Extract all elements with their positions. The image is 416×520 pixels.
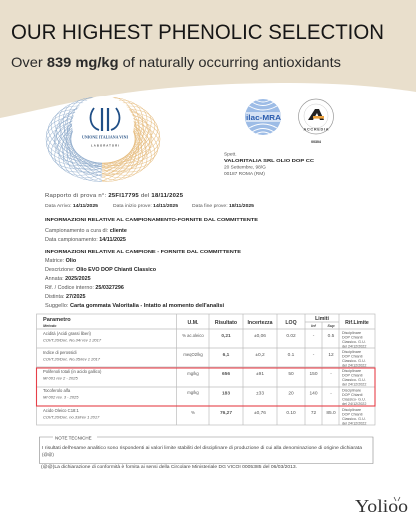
row: tocoferolo: MI 002 rev. 3 - 2025 [43, 394, 79, 400]
footnote: (@@)La dichiarazione di conformità è fornita ai sensi della Circolare Ministeriale DG VICOI 0005385 del 06/03/2013. [41, 464, 297, 469]
icon: Accredia logo [298, 99, 334, 134]
row: acido oleico: 0.10 [286, 410, 296, 416]
sampling information: INFORMAZIONI RELATIVE AL CAMPIONAMENTO-FORNITE DAL COMMITTENTE [45, 217, 259, 223]
logo subtext: LABORATORI [91, 144, 119, 148]
addressee block: Spett. [224, 152, 237, 158]
row: tocoferolo: Tocoferolo alfa [43, 388, 71, 393]
row: acido oleico: ±0,76 [254, 410, 266, 416]
dates line: Data Arrivo: 14/11/2025 [45, 203, 99, 208]
row: acidita: COI/T.20/Doc. No.34/ rev 1 2017 [43, 338, 102, 342]
header banner background [0, 0, 416, 118]
row: acido oleico: Disciplinare [342, 408, 361, 412]
guilloche orange half [102, 97, 160, 182]
sample information: Annata: 2025/2025 [45, 276, 91, 282]
table header: Metodo [43, 324, 57, 328]
row: perossidi: Indice di perossidi [43, 350, 77, 355]
row: polifenoli: Classico- G.U. [342, 378, 366, 382]
table header: Parametro [43, 317, 71, 323]
addressee block: VALORITALIA SRL OLIO DOP CC [224, 158, 315, 164]
technical notes box: (@@) [42, 452, 54, 457]
row: polifenoli: mg/kg [187, 371, 199, 376]
row: perossidi: - [313, 353, 315, 358]
row: polifenoli: Disciplinare [342, 369, 361, 373]
technical notes box [40, 436, 373, 464]
report number line: Rapporto di prova n°: 25FI17795 del 18/11/2025 [45, 193, 184, 199]
row: polifenoli: 656 [222, 371, 230, 377]
table header: Risultato [215, 320, 237, 326]
row: acido oleico: % [191, 410, 195, 415]
results table [36, 314, 375, 425]
row: acido oleico: Acido Oleico C18:1 [43, 408, 80, 413]
table header: U.M. [188, 320, 199, 326]
row: polifenoli: del 24/12/2022 [342, 382, 366, 386]
sample information: Suggello: Carta gommata Valoritalia - Intatto al momento dell'analisi [45, 303, 225, 309]
row: polifenoli: 150 [309, 371, 318, 377]
row: tocoferolo [43, 388, 366, 406]
row: polifenoli: Polifenoli totali (in acido gallico) [43, 369, 102, 374]
sample information: INFORMAZIONI RELATIVE AL CAMPIONE - FORNITE DAL COMMITTENTE [45, 249, 242, 255]
row: polifenoli [43, 369, 366, 386]
dates line [45, 203, 255, 208]
addressee block: 00187 ROMA (RM) [224, 171, 265, 177]
row: tocoferolo: Classico- G.U. [342, 398, 366, 402]
row: tocoferolo: 140 [309, 390, 318, 396]
row: tocoferolo: 20 [288, 390, 294, 396]
row: perossidi: COI/T.20/Doc. No.35/rev 1 2017 [43, 356, 101, 362]
row: tocoferolo: mg/kg [187, 390, 199, 395]
addressee block [224, 152, 315, 177]
dates line: Data fine prove: 18/11/2025 [192, 203, 255, 208]
row: acidita [43, 331, 366, 348]
notes label: NOTE TECNICHE [55, 436, 92, 440]
row: polifenoli: MI 001 rev 2 - 2025 [43, 376, 78, 380]
sampling information: Campionamento a cura di: cliente [45, 228, 127, 234]
row: perossidi: del 24/12/2022 [342, 363, 366, 367]
sample information [45, 249, 242, 309]
row: acidita: DOP Chianti [342, 336, 363, 340]
table header [43, 316, 369, 328]
sample information: Descrizione: Olio EVO DOP Chianti Classico [45, 267, 157, 273]
row: acidita: Disciplinare [342, 331, 361, 335]
row: acidita: ±0,06 [254, 333, 266, 339]
sampling information: Data campionamento: 14/11/2025 [45, 237, 126, 243]
row: perossidi: Disciplinare [342, 350, 361, 354]
row: acidita: - [313, 334, 315, 339]
row: acido oleico: 72 [311, 410, 316, 416]
row: acido oleico: del 24/12/2022 [342, 421, 366, 425]
table header: Inf [311, 324, 317, 328]
logo white centre [72, 96, 134, 154]
row: polifenoli: ±91 [256, 371, 264, 377]
row: perossidi [43, 350, 366, 367]
icon: ilac-MRA logo [245, 99, 282, 135]
row: acido oleico: Classico- G.U. [342, 417, 366, 421]
row: acidita: Classico- G.U. [342, 340, 366, 344]
notes text: I risultati dell'esame analitico sono rispondenti ai valori limite stabiliti del disciplinare di produzione di cui alla denominazione di origine dichiarata [42, 445, 363, 450]
logo mark [91, 108, 119, 131]
row: perossidi: 12 [328, 352, 334, 358]
table header: Rif.Limite [345, 320, 369, 326]
row: perossidi: meqO2/kg [183, 352, 203, 357]
row: perossidi: 0.1 [288, 352, 295, 358]
table header: Limiti [315, 316, 329, 322]
guilloche logo: Unione Italiana Vini [46, 96, 160, 182]
row: acidita: Acidità (Acidi grassi liberi) [43, 331, 92, 336]
sample information: Distinta: 27/2025 [45, 294, 85, 300]
row: polifenoli: DOP Chianti [342, 374, 363, 378]
row: acido oleico: COI/T.20/Doc. no.33/rev 1 2017 [43, 414, 100, 420]
row: perossidi: DOP Chianti [342, 354, 363, 358]
accreditation number: 00304 [311, 140, 321, 144]
red highlight box [36, 368, 375, 406]
guilloche blue half [46, 97, 102, 182]
row: acido oleico [43, 408, 366, 425]
row: tocoferolo: 183 [222, 390, 230, 396]
title: OUR HIGHEST PHENOLIC SELECTION [11, 20, 384, 44]
row: acidita: 0,21 [221, 333, 231, 339]
row: perossidi: ±0,2 [255, 352, 265, 358]
row: acidita: % ac.oleico [182, 333, 204, 338]
table header: LOQ [285, 320, 297, 326]
sample information: Rif. / Codice interno: 25/0327296 [45, 285, 124, 291]
addressee block: 20 Settembre, 98/G [224, 164, 266, 170]
accredia text: ACCREDIA [304, 128, 329, 132]
row: polifenoli: 50 [288, 371, 294, 377]
row: tocoferolo: ±33 [256, 390, 264, 396]
table header: Incertezza [247, 320, 273, 326]
table grid [36, 314, 375, 425]
row: acidita: del 24/12/2022 [342, 344, 366, 348]
row: acido oleico: 85.0 [326, 410, 336, 416]
Yolioo logo: Yolioo [355, 496, 408, 516]
sample information: Matrice: Olio [45, 258, 77, 264]
subtitle: Over 839 mg/kg of naturally occurring antioxidants [11, 54, 341, 70]
row: tocoferolo: DOP Chianti [342, 393, 363, 397]
row: tocoferolo: - [330, 392, 332, 396]
ilac text: ilac-MRA [246, 113, 282, 122]
row: acidita: 0.02 [286, 333, 296, 339]
row: tocoferolo: Disciplinare [342, 388, 361, 392]
row: perossidi: 6,1 [223, 352, 230, 358]
logo text: UNIONE ITALIANA VINI [82, 134, 128, 140]
row: polifenoli: - [330, 372, 332, 377]
row: acido oleico: DOP Chianti [342, 412, 363, 416]
row: perossidi: Classico- G.U. [342, 359, 366, 363]
sampling information [45, 217, 259, 243]
row: tocoferolo: del 24/12/2022 [342, 402, 366, 406]
row: acidita: 0.5 [328, 333, 335, 339]
dates line: Data inizio prove: 14/11/2025 [113, 203, 179, 208]
table header: Sup [327, 324, 335, 328]
row: acido oleico: 76,27 [220, 410, 232, 416]
